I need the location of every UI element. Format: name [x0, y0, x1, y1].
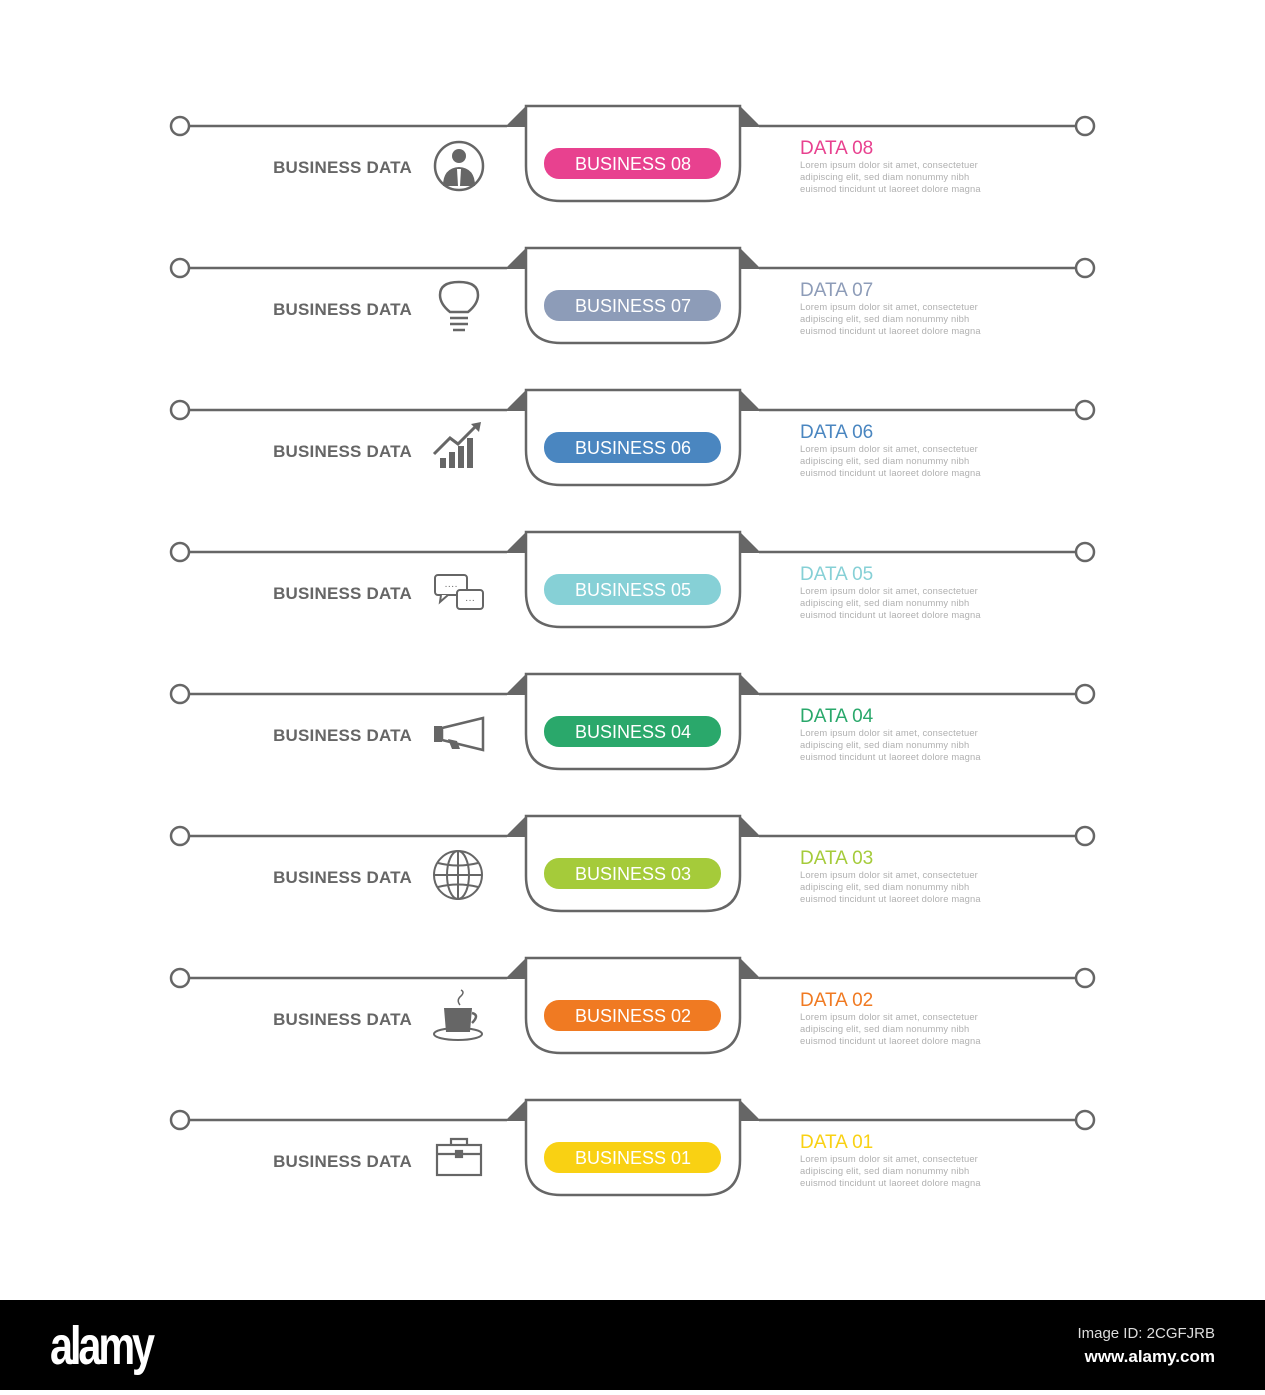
heading: data 02: DATA 02	[800, 990, 873, 1011]
footer banner	[0, 1300, 1265, 1390]
icon: chat bubbles: ····	[444, 581, 458, 592]
icon: chat bubbles: ···	[465, 595, 475, 606]
pill: business 02: BUSINESS 02	[575, 1006, 691, 1026]
pill: business 07	[544, 290, 721, 321]
heading: data 08: DATA 08	[800, 138, 873, 159]
pill: business 05: BUSINESS 05	[575, 580, 691, 600]
icon: businessman	[435, 142, 483, 190]
pill: business 06	[544, 432, 721, 463]
icon: globe	[434, 851, 482, 899]
heading: data 03: DATA 03	[800, 848, 873, 869]
pill: business 03: BUSINESS 03	[575, 864, 691, 884]
pill: business 02	[544, 1000, 721, 1031]
icon: chat bubbles	[435, 575, 483, 609]
row 08	[171, 106, 1094, 201]
icon: briefcase	[437, 1139, 481, 1175]
pill: business 01: BUSINESS 01	[575, 1148, 691, 1168]
pill: business 08	[544, 148, 721, 179]
icon: growth chart	[434, 422, 481, 468]
row 04	[171, 674, 1094, 769]
pill: business 05	[544, 574, 721, 605]
icon: megaphone	[434, 718, 483, 750]
pill: business 03	[544, 858, 721, 889]
row 05	[171, 532, 1094, 627]
heading: data 01: DATA 01	[800, 1132, 873, 1153]
heading: data 07: DATA 07	[800, 280, 873, 301]
heading: data 05: DATA 05	[800, 564, 873, 585]
row 07	[171, 248, 1094, 343]
pill: business 07: BUSINESS 07	[575, 296, 691, 316]
row 02	[171, 958, 1094, 1053]
row 01	[171, 1100, 1094, 1195]
url: www.alamy.com	[1084, 1347, 1215, 1366]
logo: alamy: alamy	[50, 1316, 155, 1376]
row 06	[171, 390, 1094, 485]
pill: business 08: BUSINESS 08	[575, 154, 691, 174]
pill: business 06: BUSINESS 06	[575, 438, 691, 458]
heading: data 06: DATA 06	[800, 422, 873, 443]
pill: business 04: BUSINESS 04	[575, 722, 691, 742]
pill: business 04	[544, 716, 721, 747]
icon: light bulb	[440, 282, 478, 330]
image id: Image ID: 2CGFJRB	[1077, 1325, 1215, 1342]
row 03	[171, 816, 1094, 911]
heading: data 04: DATA 04	[800, 706, 874, 727]
icon: coffee cup	[434, 990, 482, 1040]
pill: business 01	[544, 1142, 721, 1173]
